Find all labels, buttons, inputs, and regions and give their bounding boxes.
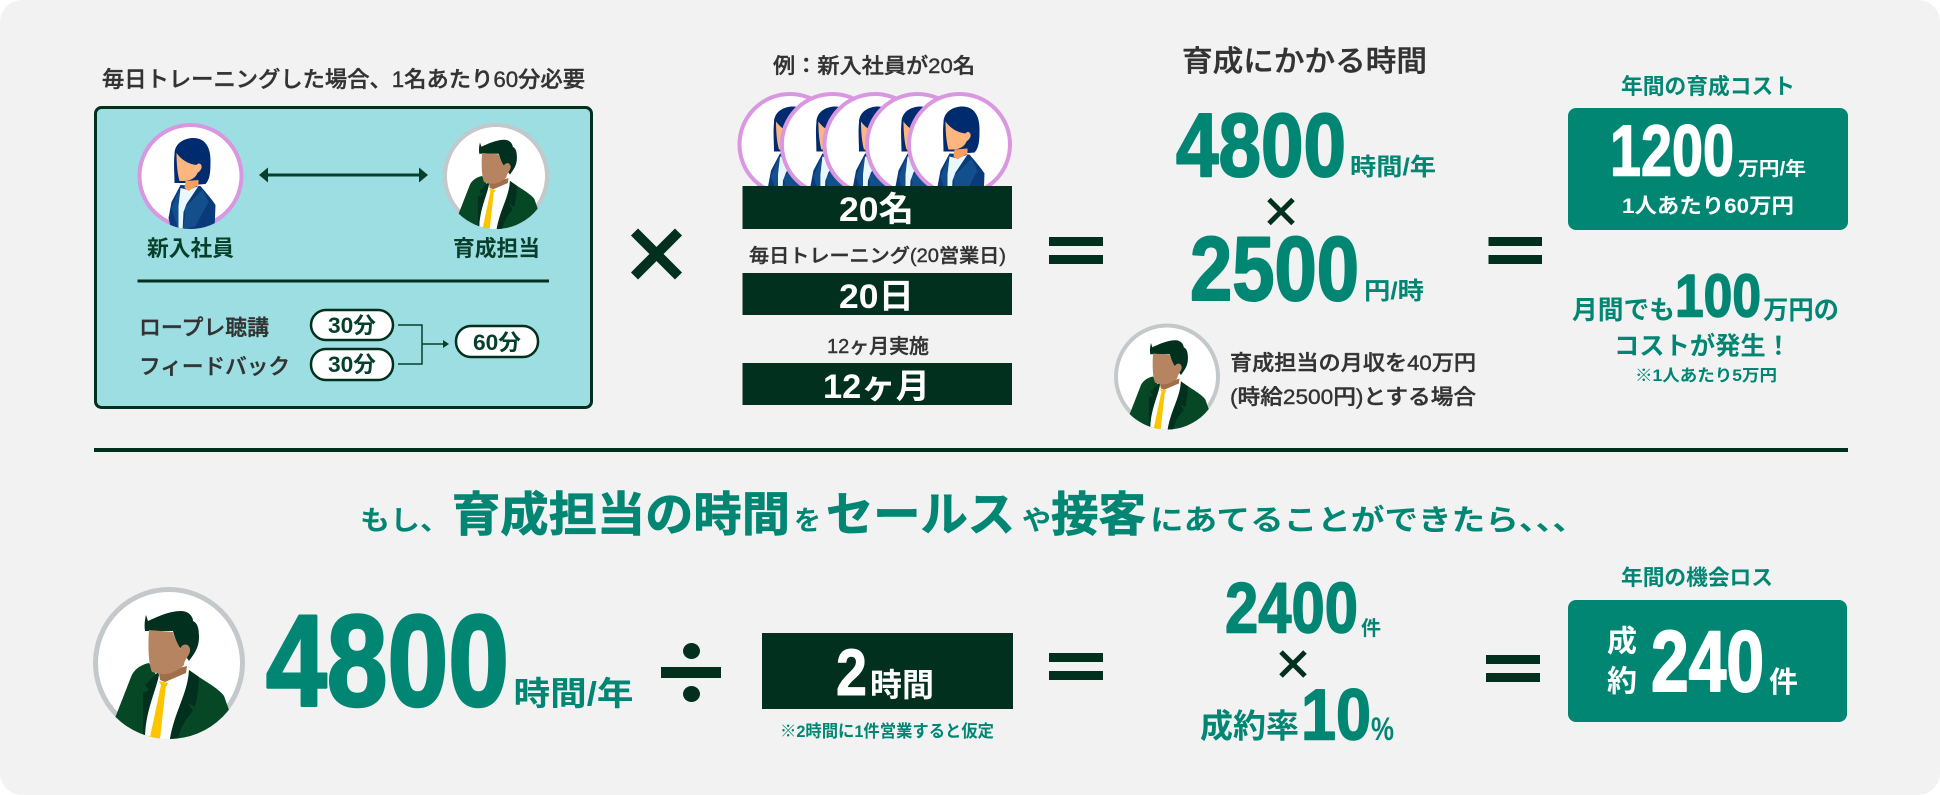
figure: 4800 hours per year large: 時間/年 <box>514 675 634 712</box>
figure: closing rate 10 percent <box>1200 676 1394 756</box>
band: 2 hours: 2 <box>836 635 867 709</box>
figure: 2400 cases: 2400 <box>1225 570 1358 648</box>
headline: what if the trainer's time went to sales: を <box>794 506 821 536</box>
label: daily training 20 business days: 毎日トレーニング(20営業日) <box>749 245 1006 267</box>
band: 20 people <box>742 186 1012 229</box>
label: trainer: 育成担当 <box>453 236 540 261</box>
pill: 60 minutes total <box>456 326 538 357</box>
callout: monthly cost: コストが発生！ <box>1614 332 1791 360</box>
label: role play listening: ロープレ聴講 <box>139 316 269 340</box>
icon: trainer large <box>96 590 242 741</box>
band: 12 months: 12ヶ月 <box>823 368 930 406</box>
band: 2 hours <box>762 633 1013 709</box>
headline: what if the trainer's time went to sales: 接客 <box>1051 488 1146 541</box>
connector arrow <box>398 325 449 364</box>
panel: one-on-one training <box>96 108 592 408</box>
operator: small multiply <box>1281 652 1305 676</box>
icon: new employee <box>140 125 242 231</box>
figure: 4800 hours per year: 4800 <box>1176 96 1346 196</box>
headline: what if the trainer's time went to sales <box>360 488 1586 541</box>
callout: monthly cost: 万円の <box>1763 295 1839 325</box>
icon: trainer <box>445 125 547 230</box>
band: 12 months <box>742 363 1012 406</box>
figure: 4800 hours per year large: 4800 <box>266 588 509 734</box>
callout: monthly cost: 月間でも <box>1572 295 1675 325</box>
note: trainer salary assumption <box>1230 352 1476 409</box>
band: 20 people: 20名 <box>839 191 914 229</box>
heading: training time per person: 毎日トレーニングした場合、1名あたり60分必要 <box>102 67 585 92</box>
panel: opportunity loss result: 件 <box>1769 666 1798 699</box>
operator: equals <box>1486 655 1540 682</box>
pill: 30 minutes role play: 30分 <box>328 313 376 338</box>
arrow: two-way between new employee and trainer <box>259 168 428 182</box>
operator: equals <box>1488 237 1542 264</box>
note: one sale per two hours: ※2時間に1件営業すると仮定 <box>780 722 994 741</box>
operator: divide <box>661 643 721 702</box>
heading: annual training cost: 年間の育成コスト <box>1621 74 1795 99</box>
panel: annual cost result: 万円/年 <box>1738 157 1806 180</box>
callout: monthly cost <box>1572 262 1839 385</box>
note: trainer salary assumption: 育成担当の月収を40万円 <box>1230 352 1476 375</box>
figure: closing rate 10 percent: 10 <box>1301 676 1371 756</box>
panel: annual cost result: 1人あたり60万円 <box>1622 195 1794 218</box>
figure: 2500 yen per hour: 2500 <box>1190 219 1359 320</box>
operator: multiply <box>634 232 678 276</box>
heading: example 20 new employees: 例：新入社員が20名 <box>773 55 975 78</box>
headline: what if the trainer's time went to sales: もし、 <box>360 506 450 536</box>
heading: annual opportunity loss: 年間の機会ロス <box>1621 565 1773 590</box>
panel: opportunity loss result: 約 <box>1607 666 1637 698</box>
operator: equals <box>1049 237 1103 264</box>
note: trainer salary assumption: (時給2500円)とする場合 <box>1230 386 1476 409</box>
pill: 30 minutes feedback: 30分 <box>328 352 376 377</box>
figure: 2500 yen per hour: 円/時 <box>1364 278 1424 305</box>
callout: monthly cost: ※1人あたり5万円 <box>1635 366 1777 385</box>
figure: closing rate 10 percent: % <box>1371 711 1394 747</box>
headline: what if the trainer's time went to sales: 育成担当の時間 <box>452 488 790 541</box>
label: feedback: フィードバック <box>139 355 290 379</box>
headline: what if the trainer's time went to sales: セールス <box>826 488 1015 541</box>
band: 2 hours: 時間 <box>870 667 934 703</box>
band: 20 days <box>742 273 1012 316</box>
heading: training time: 育成にかかる時間 <box>1182 45 1427 78</box>
figure: closing rate 10 percent: 成約率 <box>1200 708 1299 744</box>
label: new employee: 新入社員 <box>147 236 234 261</box>
panel: annual cost result: 1200 <box>1610 112 1734 192</box>
headline: what if the trainer's time went to sales: や <box>1022 506 1051 536</box>
operator: equals <box>1049 653 1103 680</box>
label: 12 months: 12ヶ月実施 <box>827 335 929 358</box>
callout: monthly cost: 100 <box>1675 262 1761 330</box>
pill: 30 minutes feedback <box>311 349 393 380</box>
panel: opportunity loss result: 240 <box>1651 614 1764 710</box>
pill: 60 minutes total: 60分 <box>473 330 521 355</box>
operator: small multiply <box>1269 200 1293 224</box>
icon group: new employees <box>740 94 1010 200</box>
band: 20 days: 20日 <box>839 278 914 316</box>
pill: 30 minutes role play <box>311 310 393 340</box>
icon: trainer small <box>1116 326 1218 431</box>
panel: opportunity loss result <box>1568 600 1847 722</box>
panel: annual cost result <box>1568 108 1848 230</box>
headline: what if the trainer's time went to sales: にあてることができたら、、、 <box>1150 503 1586 537</box>
figure: 4800 hours per year: 時間/年 <box>1350 154 1436 181</box>
panel: opportunity loss result: 成 <box>1607 626 1637 658</box>
figure: 2400 cases: 件 <box>1361 617 1381 640</box>
